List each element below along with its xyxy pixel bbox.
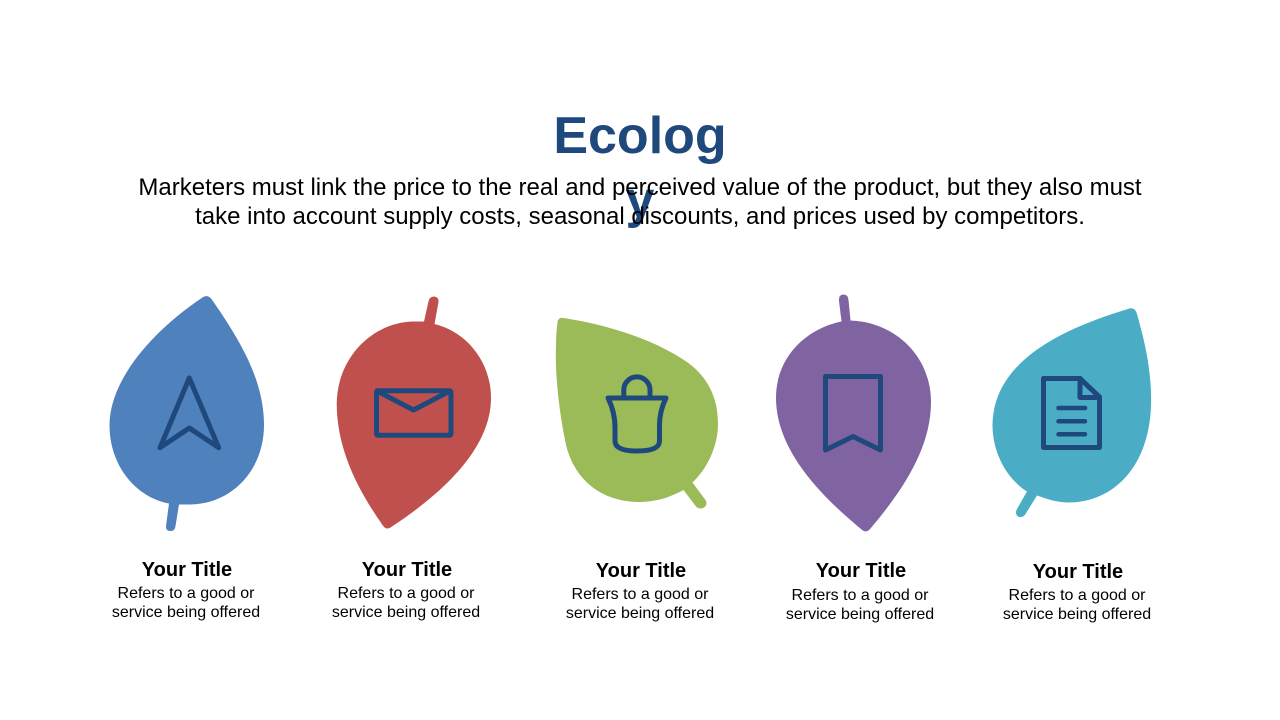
intro text: Marketers must link the price to the real and perceived value of the product, but they also must xyxy=(138,174,1142,201)
caption 5 xyxy=(1003,561,1151,623)
icon: document xyxy=(1044,378,1100,448)
caption 5: service being offered xyxy=(1003,606,1151,623)
caption 2 xyxy=(332,559,480,621)
leaf 4: purple xyxy=(776,294,931,531)
icon: envelope xyxy=(376,391,451,435)
title xyxy=(553,107,727,229)
caption 1 xyxy=(112,559,260,621)
caption 4 xyxy=(786,560,934,623)
caption 5: Your Title xyxy=(1033,561,1123,583)
caption 4: Refers to a good or xyxy=(792,587,928,604)
caption 1: service being offered xyxy=(112,604,260,621)
icon: navigation arrow xyxy=(160,378,219,448)
caption 3: Your Title xyxy=(596,560,686,582)
caption 5: Refers to a good or xyxy=(1009,587,1145,604)
caption 1: Your Title xyxy=(142,559,232,581)
leaf 1: blue xyxy=(110,296,264,531)
caption 3: service being offered xyxy=(566,605,714,622)
title: y xyxy=(626,171,654,229)
intro text: take into account supply costs, seasonal discounts, and prices used by competitors. xyxy=(195,203,1085,230)
title: Ecolog xyxy=(553,107,727,165)
caption 1: Refers to a good or xyxy=(118,585,254,602)
caption 2: service being offered xyxy=(332,604,480,621)
caption 3: Refers to a good or xyxy=(572,586,708,603)
icon: shopping bag xyxy=(608,377,666,451)
leaf 3: green xyxy=(556,318,718,509)
caption 4: Your Title xyxy=(816,560,906,582)
caption 2: Refers to a good or xyxy=(338,585,474,602)
leaf 2: red xyxy=(337,296,491,529)
caption 3 xyxy=(566,560,714,622)
icon: bookmark xyxy=(826,376,880,450)
caption 2: Your Title xyxy=(362,559,452,581)
caption 4: service being offered xyxy=(786,606,934,623)
intro text xyxy=(138,174,1142,230)
leaf 5: teal xyxy=(992,308,1151,517)
